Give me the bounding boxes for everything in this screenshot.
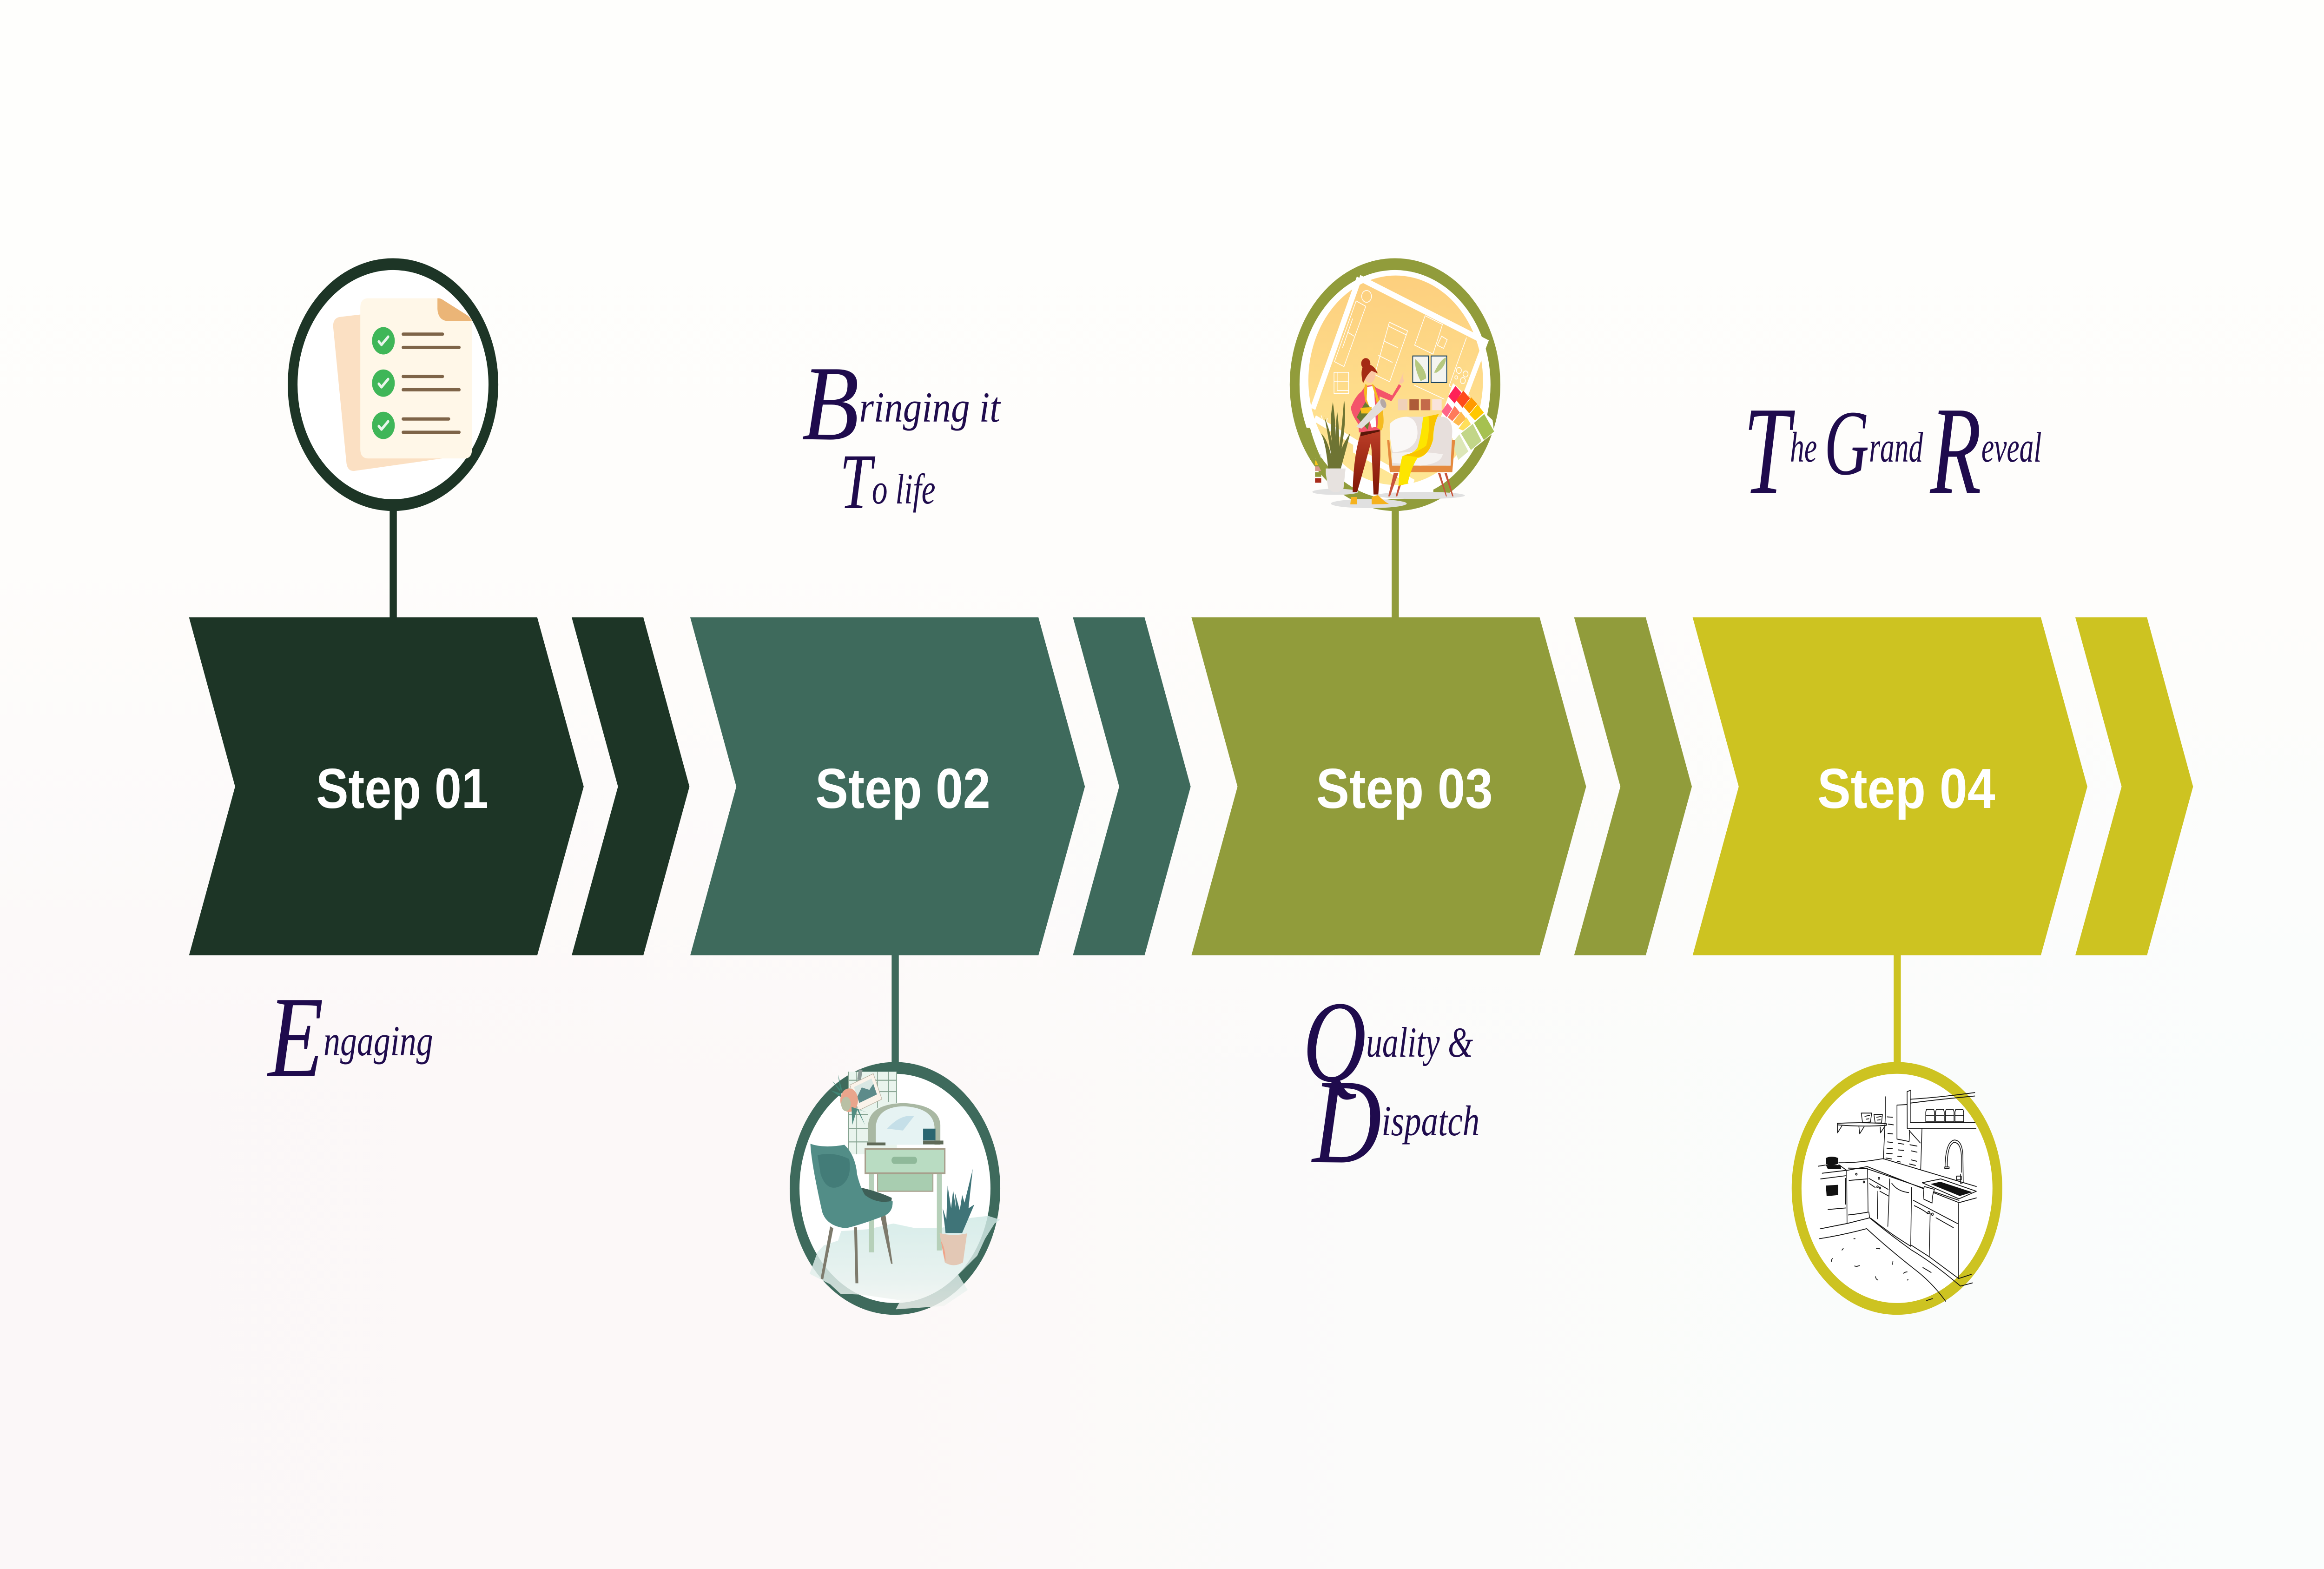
heading: quality and dispatch: uality & — [1366, 1020, 1473, 1066]
heading: quality and dispatch: Q — [1302, 977, 1366, 1106]
heading: the grand reveal: G — [1824, 391, 1869, 494]
designer figure — [1350, 358, 1404, 504]
plant — [1321, 399, 1350, 492]
wall and tiles — [1883, 1097, 1885, 1159]
heading: bringing it to life: T — [840, 438, 876, 525]
colour fan — [1440, 383, 1494, 461]
heading: bringing it to life: o life — [872, 466, 936, 513]
chair — [821, 1226, 833, 1279]
heading: the grand reveal: he — [1790, 424, 1824, 471]
heading: bringing it to life — [802, 344, 1001, 525]
blueprint walls — [1313, 278, 1486, 494]
heading: engaging: E — [267, 973, 324, 1101]
counter — [1839, 1159, 1976, 1186]
mirror — [868, 1103, 940, 1145]
connector: step 04 — [1894, 954, 1901, 1064]
oven, pot, sink outlines — [1922, 1179, 1976, 1199]
panel: step 04 — [1693, 617, 2193, 1064]
connector: step 03 — [1392, 509, 1399, 619]
label: step 01: Step 01 — [316, 756, 489, 820]
label: step 02: Step 02 — [815, 756, 990, 820]
icon: designer with blueprint in ring — [1294, 264, 1495, 508]
flower — [831, 1074, 867, 1125]
ring remnants — [1306, 428, 1326, 479]
heading: the grand reveal: T — [1743, 381, 1795, 520]
chevron: step 02 tail — [1073, 617, 1191, 955]
heading: quality and dispatch: D — [1311, 1055, 1381, 1188]
heading: the grand reveal: R — [1929, 381, 1981, 520]
panel: step 03 — [1191, 509, 1692, 955]
heading: engaging: ngaging — [324, 1018, 433, 1065]
moodboard — [849, 1072, 897, 1154]
jars — [1926, 1109, 1964, 1122]
chevron: step 03 main — [1191, 617, 1586, 955]
panel: step 01 — [189, 509, 689, 955]
heading: quality and dispatch — [1302, 977, 1479, 1188]
vanity table — [869, 1172, 874, 1252]
chevron: step 03 tail — [1574, 617, 1692, 955]
label: step 04: Step 04 — [1817, 756, 1995, 820]
framed prints — [1413, 356, 1447, 383]
material swatches — [1398, 399, 1442, 410]
connector: step 01 — [390, 509, 397, 619]
chevron: step 04 tail — [2075, 617, 2193, 955]
connector: step 02 — [891, 954, 899, 1064]
icon: kitchen line drawing in ring — [1796, 1068, 1997, 1309]
paint chips — [1315, 454, 1321, 483]
heading: bringing it to life: B — [802, 344, 859, 463]
shelf — [1837, 1123, 1887, 1126]
icon: watercolor vanity in ring — [795, 1068, 1000, 1309]
plant — [943, 1169, 974, 1233]
chevron: step 04 main — [1693, 617, 2087, 955]
heading: quality and dispatch: ispatch — [1381, 1098, 1479, 1145]
icon: checklist in ring — [293, 264, 494, 505]
panel: step 02 — [690, 617, 1191, 1064]
armchair — [1387, 414, 1455, 497]
heading: the grand reveal: rand — [1869, 424, 1930, 471]
chevron: step 02 main — [690, 617, 1085, 955]
floor shadows — [1312, 489, 1465, 508]
chevron: step 01 tail — [572, 617, 689, 955]
chevron: step 01 main — [189, 617, 584, 955]
label: step 03: Step 03 — [1316, 756, 1493, 820]
faucet — [1945, 1140, 1963, 1183]
heading: bringing it to life: ringing it — [859, 384, 1001, 431]
heading: the grand reveal: eveal — [1981, 424, 2042, 471]
